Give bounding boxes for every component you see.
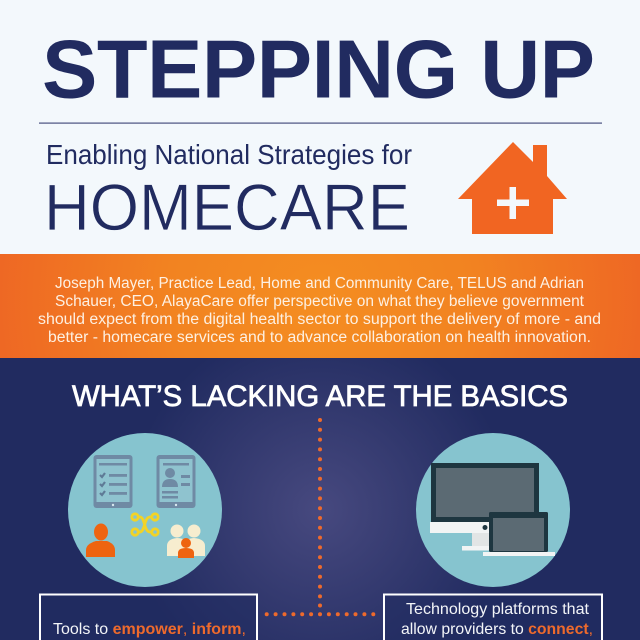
panel: intro banner bbox=[0, 254, 640, 358]
icon: connection nodes bbox=[132, 514, 158, 535]
icon: family bbox=[167, 524, 205, 558]
text box: platforms bbox=[384, 594, 602, 640]
text box: platforms: allow providers to connect, bbox=[401, 621, 593, 638]
dotted connector bbox=[265, 418, 375, 616]
heading: homecare: HOMECARE bbox=[44, 170, 410, 244]
text box: tools: Tools to empower, inform, bbox=[53, 621, 246, 638]
text box: tools bbox=[40, 594, 257, 640]
intro text: Joseph Mayer, Practice Lead, Home and Community Care, TELUS and Adrian bbox=[55, 275, 584, 292]
icon: desktop monitor bbox=[430, 463, 540, 550]
icon: devices circle bbox=[416, 433, 570, 587]
subtitle: Enabling National Strategies for bbox=[46, 139, 412, 170]
tablet: care plan bbox=[156, 455, 196, 508]
icon: house with plus bbox=[458, 142, 567, 234]
intro text: Schauer, CEO, AlayaCare offer perspective on what they believe government bbox=[55, 293, 585, 310]
text box: platforms: Technology platforms that bbox=[406, 601, 590, 618]
section heading: WHAT’S LACKING ARE THE BASICS bbox=[72, 380, 568, 413]
panel: basics section bbox=[0, 358, 640, 640]
tablet: assessment bbox=[94, 455, 132, 508]
intro text: better - homecare services and to advance collaboration on health innovation. bbox=[48, 329, 591, 346]
header background bbox=[0, 0, 640, 254]
icon: clinician bbox=[86, 524, 115, 557]
icon: care tools circle bbox=[68, 433, 222, 587]
title: STEPPING UP bbox=[42, 22, 595, 116]
icon: laptop bbox=[483, 512, 555, 556]
intro text bbox=[38, 275, 601, 346]
intro text: should expect from the digital health sector to support the delivery of more - and bbox=[38, 311, 601, 328]
